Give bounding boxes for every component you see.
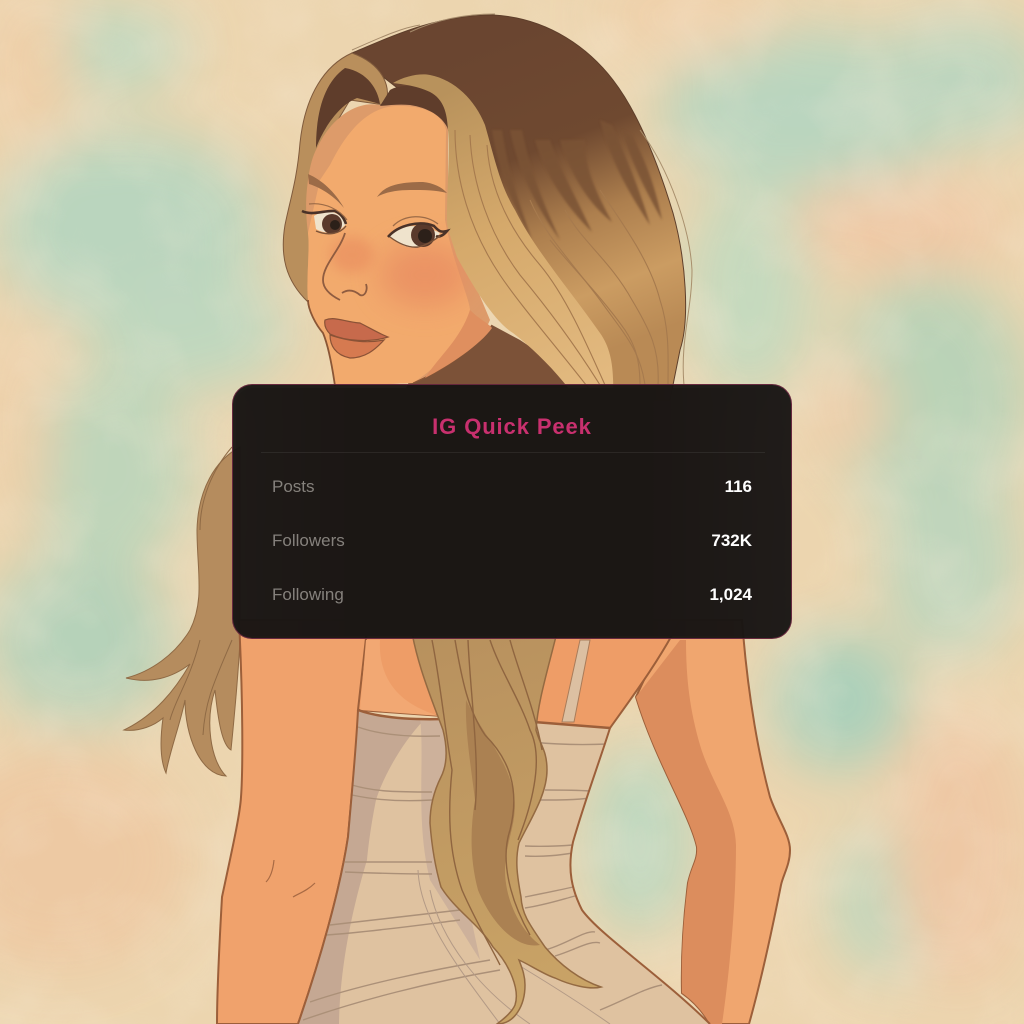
row: following: Following bbox=[272, 585, 344, 604]
heading: IG Quick Peek: IG Quick Peek bbox=[432, 414, 592, 439]
face: left eye bbox=[302, 204, 347, 234]
row: following bbox=[272, 585, 752, 604]
hair: dark feathered streaks bbox=[492, 120, 662, 240]
figure: left arm bbox=[217, 620, 368, 1024]
hair: dark underside behind neck bbox=[400, 325, 610, 400]
row: following: 1,024 bbox=[709, 585, 752, 604]
face: lips bbox=[325, 319, 388, 358]
face: eyebrows bbox=[308, 174, 447, 208]
hair: dark hairline partings bbox=[316, 68, 449, 148]
hair: left tan lock bbox=[283, 53, 387, 302]
hair: strands falling behind left arm bbox=[124, 447, 240, 776]
hair: long lock down the back bbox=[410, 620, 601, 1024]
face: nose bbox=[323, 233, 367, 300]
row: posts: Posts bbox=[272, 477, 315, 496]
figure: dress bbox=[298, 710, 710, 1024]
hair: blond front section with strands bbox=[393, 74, 668, 400]
figure: face bbox=[306, 103, 492, 386]
row: followers: 732K bbox=[711, 531, 752, 550]
figure: bare back bbox=[358, 620, 680, 728]
row: followers: Followers bbox=[272, 531, 345, 550]
face: right eye bbox=[388, 217, 447, 247]
row: posts bbox=[272, 477, 752, 496]
figure: right arm bbox=[636, 620, 790, 1024]
hair: crown and back gradient bbox=[352, 14, 692, 400]
panel: IG Quick Peek stats card bbox=[232, 384, 792, 639]
row: followers bbox=[272, 531, 752, 550]
figure: arm crease marks bbox=[266, 860, 315, 897]
dress strap bbox=[562, 640, 590, 722]
row: posts: 116 bbox=[725, 477, 752, 496]
